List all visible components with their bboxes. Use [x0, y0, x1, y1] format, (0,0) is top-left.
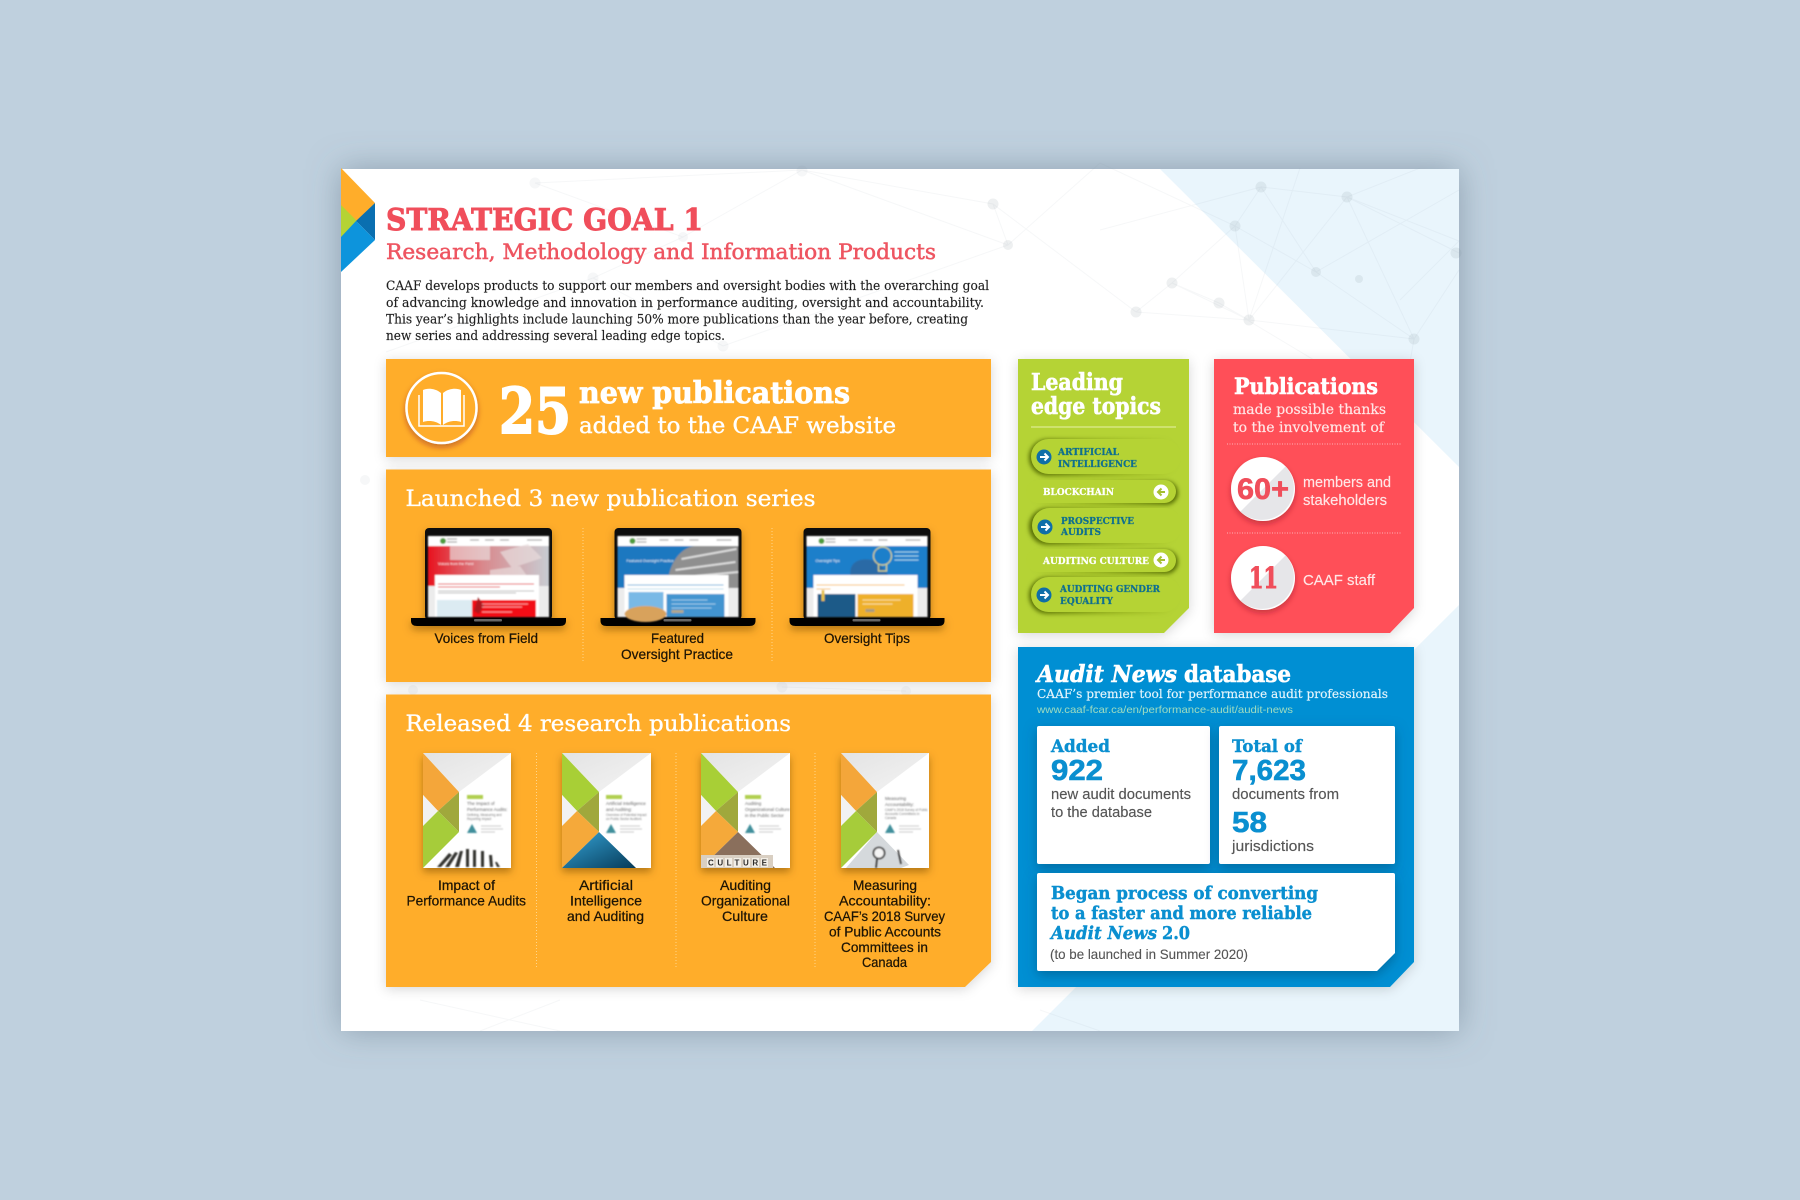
label: Featured Oversight Practice: Featured	[651, 630, 704, 646]
box: Audit News 2.0	[1037, 873, 1395, 971]
pill: Artificial Intelligence: INTELLIGENCE	[1058, 459, 1137, 470]
intro text	[386, 279, 989, 344]
label: Auditing Organizational Culture: Organizational	[701, 893, 790, 909]
sub-heading: to the involvement of	[1233, 420, 1386, 436]
cover: Impact of Performance Audits: Defining, Measuring and	[467, 813, 502, 817]
intro text: This year’s highlights include launching 50% more publications than the year before, creating	[386, 312, 968, 328]
text: new publications: new publications	[579, 376, 850, 411]
cover: Impact of Performance Audits: Performance Audits:	[467, 807, 508, 812]
intro text: of advancing knowledge and innovation in performance auditing, oversight and accountability.	[386, 296, 984, 311]
pill: Auditing Gender Equality: AUDITING GENDER	[1059, 584, 1160, 595]
box: Audit News 2.0: to a faster and more reliable	[1051, 903, 1312, 924]
label: Artificial Intelligence and Auditing: Intelligence	[570, 893, 642, 909]
sub-heading	[1233, 402, 1386, 436]
box: total 7,623: Total of	[1232, 737, 1304, 757]
laptop: Featured Oversight Practice: Featured Oversight Practice	[626, 559, 674, 563]
report card	[341, 163, 1462, 1031]
panel: Audit News database	[1018, 647, 1414, 987]
pill: Auditing Gender Equality: EQUALITY	[1060, 596, 1113, 607]
heading	[1035, 661, 1291, 688]
cover: Measuring Accountability: Measuring	[885, 796, 907, 801]
box: total 7,623: jurisdictions	[1231, 838, 1314, 855]
pill: Auditing Gender Equality	[1029, 577, 1181, 614]
cover: Auditing Organizational Culture: in the Public Sector	[745, 813, 784, 818]
label: Auditing Organizational Culture: Auditing	[720, 877, 771, 893]
pill: Artificial Intelligence	[1029, 439, 1181, 476]
box: added 922: Added	[1050, 737, 1110, 757]
cover: Measuring Accountability: Accounts Committees in	[885, 812, 920, 816]
stat: 11: 11	[1249, 561, 1278, 595]
laptop: Featured Oversight Practice	[600, 528, 756, 626]
box: total 7,623	[1219, 726, 1395, 864]
pill: Auditing Culture	[1026, 549, 1178, 574]
box: added 922: 922	[1051, 755, 1103, 787]
cover: Auditing Organizational Culture: CULTURE	[708, 858, 768, 868]
box: added 922	[1037, 726, 1210, 864]
box: Audit News 2.0: Began process of converting	[1051, 883, 1318, 904]
label: Measuring Accountability: of Public Accounts	[829, 924, 941, 940]
cover: Measuring Accountability	[841, 753, 929, 868]
icon: open book	[406, 373, 476, 443]
tagline: CAAF’s premier tool for performance audit professionals	[1037, 686, 1388, 701]
url: www.caaf-fcar.ca/en/performance-audit/audit-news	[1036, 704, 1293, 716]
cover: Auditing Organizational Culture: Organizational Culture	[745, 807, 790, 812]
text: added to the CAAF website: added to the CAAF website	[579, 414, 896, 439]
panel: publication series	[386, 470, 991, 682]
stat: 11	[1231, 546, 1376, 610]
label: Auditing Organizational Culture: Culture	[722, 908, 768, 924]
label: Artificial Intelligence and Auditing: Artificial	[579, 877, 633, 893]
cover: Measuring Accountability: Accountability:	[885, 802, 914, 807]
cover: Artificial Intelligence and Auditing: on Public Sector Auditors	[606, 817, 642, 821]
heading: edge topics	[1031, 393, 1161, 420]
box: Audit News 2.0: Audit News	[1049, 923, 1157, 944]
cover: Impact of Performance Audits: Reporting Impact	[467, 817, 491, 821]
cover: Auditing Organizational Culture: Auditing	[745, 801, 762, 806]
laptop: Oversight Tips	[790, 528, 944, 626]
box: total 7,623: documents from	[1232, 786, 1339, 803]
panel: publications involvement	[1214, 359, 1414, 633]
big number 25: 25	[499, 374, 571, 448]
heading: Audit News	[1035, 661, 1177, 688]
cover: Artificial Intelligence and Auditing: Overview of Potential Impact	[606, 813, 647, 817]
label: Measuring Accountability: Accountability:	[839, 893, 931, 909]
pill: Blockchain: BLOCKCHAIN	[1043, 487, 1114, 498]
stat: 60+	[1231, 457, 1391, 521]
pill: Blockchain	[1026, 480, 1178, 505]
label: Measuring Accountability: CAAF’s 2018 Survey	[824, 908, 945, 924]
corner logo flag	[341, 168, 375, 272]
pill: Prospective Audits: PROSPECTIVE	[1061, 516, 1134, 527]
cover: Impact of Performance Audits	[423, 753, 511, 868]
label: Featured Oversight Practice	[621, 630, 733, 662]
box: total 7,623: 58	[1232, 807, 1267, 839]
dividers	[536, 753, 815, 968]
dividers	[583, 528, 772, 663]
heading: Released 4 research publications	[406, 711, 791, 737]
heading: database	[1184, 661, 1291, 688]
panel: leading edge topics	[1018, 359, 1189, 633]
heading	[1031, 369, 1161, 420]
label: Artificial Intelligence and Auditing	[567, 877, 644, 924]
label: Measuring Accountability: Measuring	[853, 877, 917, 893]
cover: Impact of Performance Audits: The Impact of	[467, 801, 495, 806]
intro text: CAAF develops products to support our members and oversight bodies with the overarching goal	[386, 279, 989, 294]
panel: research publications	[386, 694, 991, 987]
laptop: Voices from Field	[411, 528, 566, 626]
light blue corner backgrounds	[1032, 169, 1459, 1031]
heading: Publications	[1234, 374, 1378, 400]
cover: Artificial Intelligence and Auditing	[562, 753, 651, 868]
box: Audit News 2.0: (to be launched in Summer 2020)	[1050, 946, 1248, 962]
subtitle: Research, Methodology and Information Products	[386, 240, 936, 264]
cover: Measuring Accountability: CAAF’s 2018 Survey of Public	[885, 808, 928, 812]
cover: Artificial Intelligence and Auditing: and Auditing:	[606, 807, 632, 812]
title: STRATEGIC GOAL 1	[386, 203, 703, 238]
cover: Artificial Intelligence and Auditing: Artificial Intelligence	[606, 801, 646, 806]
intro text: new series and addressing several leading edge topics.	[386, 329, 725, 344]
cover: Measuring Accountability: Canada	[885, 816, 896, 820]
stat: 11: CAAF staff	[1303, 572, 1376, 589]
pill: Prospective Audits: AUDITS	[1060, 527, 1101, 538]
label: Measuring Accountability: Canada	[862, 954, 907, 970]
laptop: Oversight Tips: Oversight Tips	[816, 559, 840, 563]
laptop: Voices from Field: Voices from the Field	[438, 562, 473, 566]
label: Featured Oversight Practice: Oversight Practice	[621, 646, 733, 662]
label: Measuring Accountability: Committees in	[841, 939, 928, 955]
stat: 60+: members and	[1303, 474, 1391, 491]
pill: Artificial Intelligence: ARTIFICIAL	[1057, 447, 1119, 458]
box: added 922: new audit documents	[1051, 786, 1191, 803]
box: added 922: to the database	[1051, 804, 1152, 821]
box: Audit News 2.0: 2.0	[1162, 923, 1190, 944]
label: Impact of Performance Audits	[406, 877, 526, 909]
heading: Launched 3 new publication series	[406, 486, 816, 512]
label: Auditing Organizational Culture	[701, 877, 790, 924]
label: Voices from Field: Voices from Field	[434, 630, 538, 646]
label: Impact of Performance Audits: Performance Audits	[406, 893, 526, 909]
label: Artificial Intelligence and Auditing: and Auditing	[567, 908, 644, 924]
pill: Auditing Culture: AUDITING CULTURE	[1042, 556, 1149, 567]
sub-heading: made possible thanks	[1233, 402, 1386, 418]
label: Oversight Tips: Oversight Tips	[824, 630, 910, 646]
stat: 60+: 60+	[1237, 473, 1289, 506]
heading: Leading	[1031, 369, 1123, 396]
pill: Prospective Audits	[1029, 508, 1182, 545]
label: Impact of Performance Audits: Impact of	[438, 877, 495, 893]
panel: 25 new publications	[386, 359, 991, 457]
stat: 60+: stakeholders	[1303, 492, 1387, 509]
cover: Auditing Organizational Culture	[701, 753, 790, 868]
box: total 7,623: 7,623	[1232, 755, 1306, 787]
network pattern	[386, 163, 1459, 1031]
label: Measuring Accountability	[824, 877, 945, 970]
